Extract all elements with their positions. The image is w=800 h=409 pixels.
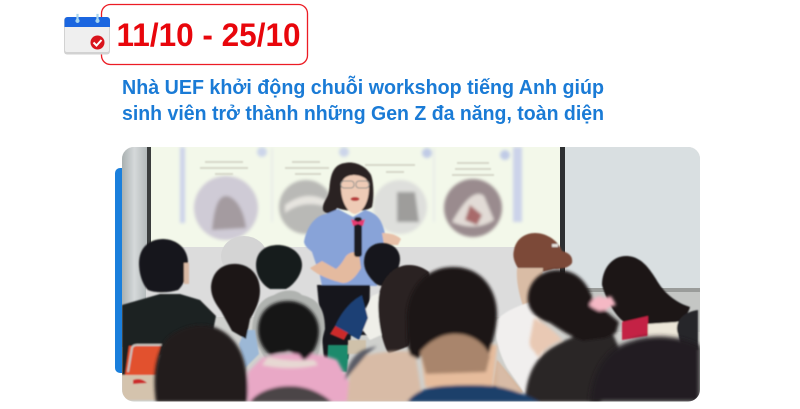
student: dark hoodie with flower: [525, 330, 620, 402]
student: man, blue collar: [497, 360, 522, 396]
heading: [122, 75, 604, 125]
student: foreground dark head: [155, 325, 248, 402]
student: left in black: [122, 294, 216, 382]
date range text: 11/10 - 25/10: [116, 17, 300, 53]
student: long hair: [378, 265, 430, 354]
student: blurred head bottom right: [590, 336, 700, 402]
slide captions: [200, 161, 494, 176]
heading: Nhà UEF khởi động chuỗi workshop tiếng Anh giúp: [122, 75, 604, 99]
infographic canvas: [64, 4, 700, 402]
student: bottom hair: [250, 386, 332, 402]
date badge: [102, 4, 308, 64]
blue accent bar: [115, 168, 122, 373]
student: bun hair: [513, 233, 572, 273]
student: pink sweater: [248, 353, 353, 402]
chairs and table: [125, 346, 161, 375]
photo: workshop classroom: [122, 147, 700, 402]
student: long hair right: [602, 256, 690, 330]
student: grey shirt: [252, 290, 326, 358]
slide photos: [194, 176, 258, 240]
back audience: [122, 233, 698, 400]
projection screen with slide: [147, 147, 565, 274]
heading: sinh viên trở thành những Gen Z đa năng, toàn diện: [122, 103, 604, 125]
speaker: [304, 163, 401, 359]
student: ponytail: [239, 330, 259, 368]
icon: calendar with check: [64, 14, 110, 54]
student: beige hoodie: [347, 351, 423, 402]
student: white shirt: [495, 302, 543, 394]
foreground audience: [155, 267, 620, 402]
room walls: [122, 147, 700, 402]
student: blue sleeve: [362, 292, 383, 340]
